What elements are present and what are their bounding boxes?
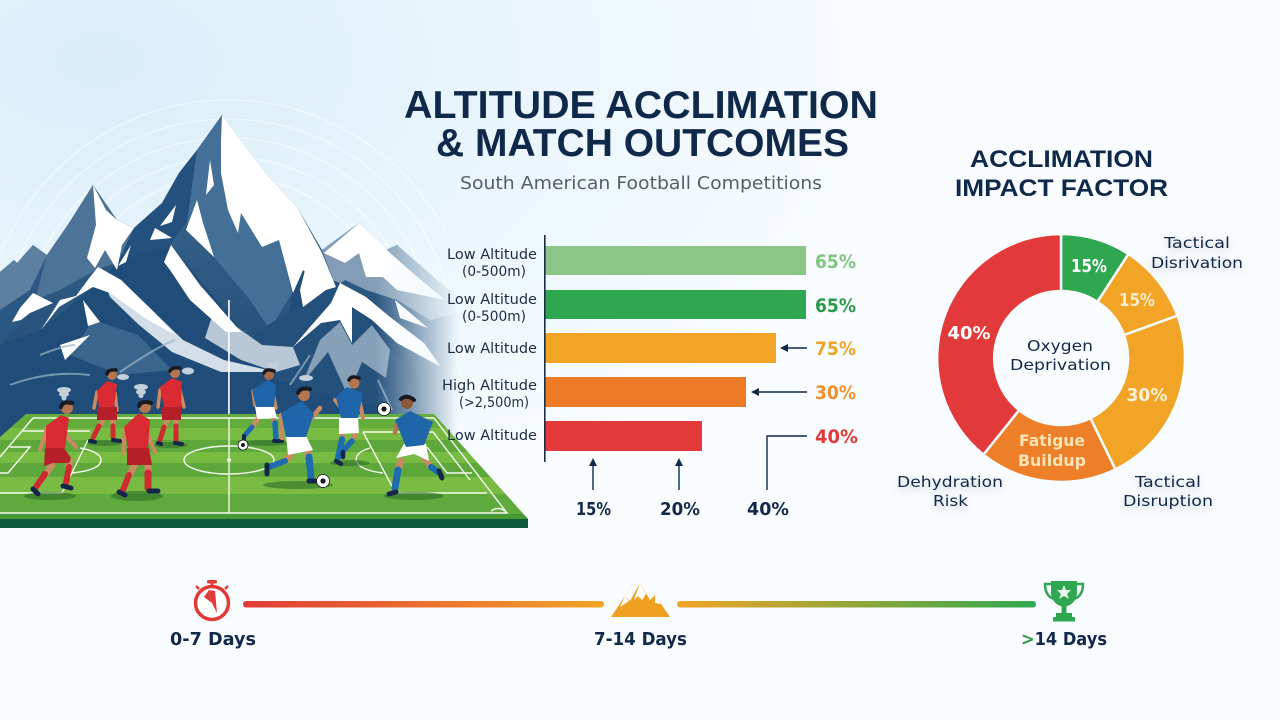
value labels: 40% [815,426,858,448]
bars [545,246,806,451]
red player 1 [33,402,76,494]
valley grey snow [205,318,300,372]
axis [544,235,546,462]
bar chart [442,235,858,520]
value labels: 30% [815,382,856,404]
bar category labels: Low Altitude [447,341,537,357]
segment values: 15% [1071,256,1107,277]
player shadows [24,440,444,501]
illustration: mountains and football pitch [0,100,528,528]
timeline labels: >14 Days [1021,629,1107,650]
icon: stopwatch [196,580,228,620]
subtitle: South American Football Competitions [460,174,822,194]
snow: small inner peak [300,270,326,307]
panel heading: acclimation impact factor: IMPACT FACTOR [955,175,1168,202]
timeline bar: late [677,601,1036,608]
breath puffs [57,362,313,400]
lower percentages: 15% [576,499,611,520]
red player 4 [158,368,184,444]
snow: left ridge [98,267,276,372]
lower percentages: 40% [747,499,789,520]
segment values: 15% [1119,290,1155,311]
bar category labels: High Altitude [442,378,537,394]
blue player 2 [267,388,320,481]
segment label: fatigue buildup: Buildup [1018,451,1086,470]
blue player 4 [389,397,442,494]
bar category labels: Low Altitude [447,428,537,444]
snow: main peak [221,115,336,293]
blue player 1 [244,370,282,441]
segment values: 30% [1126,385,1168,406]
football pitch [0,414,530,528]
lower percentages [576,499,789,520]
centre label: Oxygen [1027,337,1093,355]
centre label [1010,337,1111,374]
snow: right foreground peak [293,283,441,367]
snow: left peak [87,185,134,270]
pitch centre axis line over mountains [228,300,230,420]
segment values [948,256,1168,406]
mountain range [0,115,455,437]
outside labels: Disrivation [1151,254,1243,272]
timeline labels [170,629,1107,650]
main title: & MATCH OUTCOMES [436,122,849,165]
red player 3 [119,401,158,495]
outside labels: Disruption [1123,492,1213,510]
acclimation timeline [170,580,1107,650]
segments [937,234,1185,482]
bar category labels: Low Altitude [447,292,537,308]
value labels: 75% [815,338,856,360]
value labels [815,251,858,448]
outside labels: Tactical [1163,234,1230,252]
value labels: 65% [815,295,856,317]
outside labels [897,234,1243,510]
main title: ALTITUDE ACCLIMATION [404,84,878,127]
bar category labels [442,247,537,444]
panel heading: acclimation impact factor [955,146,1168,202]
altitude rings [0,100,445,282]
footballs [238,402,390,488]
bar category labels: Low Altitude [447,247,537,263]
timeline bar: early [243,601,604,608]
lower percentages: 20% [660,499,700,520]
dark right-hand face [267,320,276,330]
centre label: Deprivation [1010,356,1111,374]
segment label: fatigue buildup: Fatigue [1019,431,1085,450]
icon: mountain [611,583,670,617]
main title [404,84,878,165]
snow: right peak [324,223,445,300]
timeline labels: 0-7 Days [170,629,256,650]
annotation arrows [589,344,807,490]
timeline labels: 7-14 Days [594,629,687,650]
bar category labels: (0-500m) [462,309,526,325]
icon: trophy [1045,581,1083,622]
outside labels: Risk [933,492,968,510]
segment label: fatigue buildup [1018,431,1086,470]
bar category labels: (0-500m) [462,264,526,280]
outside labels: Tactical [1134,473,1201,491]
blue player 3 [335,377,363,464]
snow: central ridge [164,245,241,332]
panel heading: acclimation impact factor: ACCLIMATION [970,146,1153,173]
value labels: 65% [815,251,856,273]
segment values: 40% [948,323,990,344]
red player 2 [90,370,120,442]
snow streaks [60,160,428,360]
donut chart [897,234,1243,510]
outside labels: Dehydration [897,473,1003,491]
snow: far left [12,293,53,322]
bar category labels: (>2,500m) [459,395,529,411]
